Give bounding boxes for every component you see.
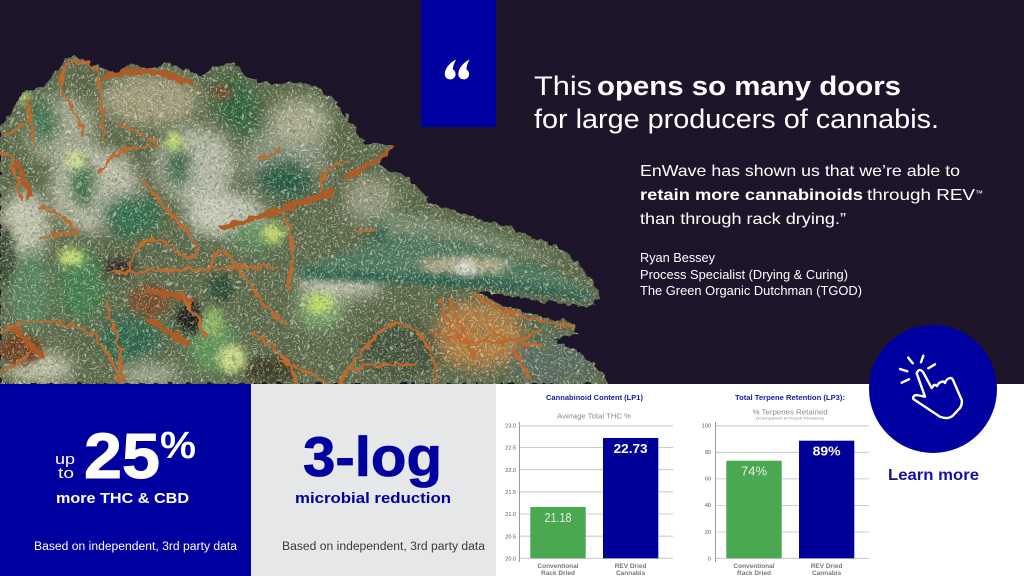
bar: REV dried 22.73 (603, 438, 658, 558)
panel: 25% more THC and CBD: more THC & CBD (56, 490, 189, 507)
headline quote: opens so many doors (597, 71, 901, 101)
quote body: than through rack drying.” (640, 211, 846, 228)
bar: REV dried 22.73: 22.73 (614, 442, 648, 456)
chart: cannabinoid content: 21.0 (505, 512, 516, 518)
panel: hero background (0, 0, 1024, 384)
stat: up to 25%: % (160, 425, 196, 467)
chart: cannabinoid content: 23.0 (505, 424, 516, 430)
attribution: Process Specialist (Drying & Curing) (640, 268, 848, 282)
headline quote: This (534, 71, 592, 101)
panel: 25% more THC and CBD: Based on independent, 3rd party data (34, 541, 238, 553)
chart: cannabinoid content: REV Dried (615, 563, 647, 570)
chart: total terpene retention: % Terpenes Retained (753, 407, 828, 416)
panel: 25% more THC and CBD (0, 384, 251, 576)
quote body: retain more cannabinoids (640, 187, 863, 204)
chart: cannabinoid content: Cannabinoid Content (LP1) (546, 395, 643, 402)
chart: cannabinoid content: Average Total THC % (557, 412, 631, 421)
stat: up to 25%: up (55, 451, 75, 468)
icon: tapping hand (900, 356, 962, 418)
photo: cannabis flower (0, 50, 620, 386)
quote body: EnWave has shown us that we’re able to (640, 163, 960, 180)
stat: up to 25%: to (58, 465, 74, 482)
attribution: Ryan Bessey (640, 251, 716, 265)
chart: cannabinoid content (505, 395, 673, 576)
chart: cannabinoid content: 22.5 (505, 446, 516, 452)
panel: 3-log microbial reduction: Based on independent, 3rd party data (282, 541, 486, 553)
quote body: ™ (975, 189, 983, 198)
chart: total terpene retention: Conventional (733, 563, 775, 570)
stat: up to 25%: 25 (84, 420, 160, 492)
bar: conventional 74%: 74% (741, 465, 767, 479)
chart: cannabinoid content: 20.5 (505, 534, 516, 540)
quote box (421, 0, 496, 127)
headline quote: for large producers of cannabis. (534, 104, 939, 134)
bar: REV dried 89% (799, 441, 854, 558)
chart: cannabinoid content: 20.0 (505, 556, 516, 562)
chart: cannabinoid content: Conventional (537, 563, 579, 570)
headline quote (534, 71, 939, 134)
bar: conventional 21.18 (530, 507, 586, 558)
panel: 3-log microbial reduction: 3-log (303, 425, 442, 488)
panel: white chart area (496, 384, 1024, 576)
bar: conventional 74% (726, 461, 782, 558)
chart: total terpene retention: REV Dried (811, 563, 843, 570)
chart: total terpene retention: 0 (708, 556, 711, 562)
bar: conventional 21.18: 21.18 (544, 511, 572, 525)
chart: total terpene retention: 100 (702, 424, 711, 430)
chart: total terpene retention: 80 (705, 450, 711, 456)
chart: total terpene retention: 40 (705, 503, 711, 509)
chart: cannabinoid content: 22.0 (505, 468, 516, 474)
icon: opening quotation mark (445, 60, 470, 79)
call to action: learn more (869, 325, 997, 484)
attribution: The Green Organic Dutchman (TGOD) (640, 284, 862, 298)
quote body: through REV (867, 187, 975, 204)
chart: total terpene retention: Total Terpene Retention (LP3): (735, 395, 845, 402)
chart: cannabinoid content: 21.5 (505, 490, 516, 496)
stat: up to 25% (55, 420, 196, 492)
quote body (640, 163, 983, 228)
panel: 3-log microbial reduction: microbial reduction (295, 490, 451, 507)
chart: total terpene retention: 20 (705, 530, 711, 536)
panel: 3-log microbial reduction (251, 384, 496, 576)
chart: total terpene retention: 60 (705, 477, 711, 483)
attribution (640, 251, 862, 298)
chart: total terpene retention: (Compared to Fresh Flowers) (756, 417, 825, 421)
call to action: learn more: Learn more (888, 467, 979, 484)
chart: total terpene retention (702, 395, 869, 576)
bar: REV dried 89%: 89% (813, 445, 841, 459)
